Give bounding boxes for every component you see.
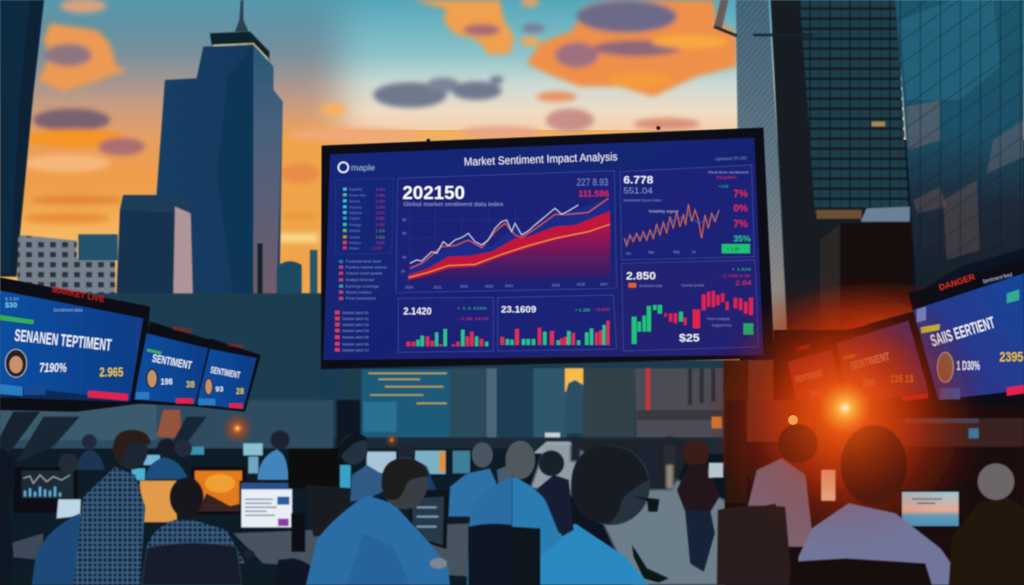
- left monitor: large sentiment screen: $ 3.90: [5, 297, 19, 303]
- sentiment percentages: 35%: [733, 233, 751, 243]
- right monitor: small sentiment screen: SENTIMENT: [794, 367, 825, 385]
- left monitor: small sentiment screen: SENTIMENT: [210, 365, 241, 380]
- seated man in blue shirt at laptop: [306, 457, 450, 585]
- left monitor: large sentiment screen: SENANEN TEPTIMENT: [14, 326, 112, 355]
- skyline: left buildings and blue tower: [0, 0, 333, 440]
- left sidebar list: sentiment tickers: 3.204: [376, 205, 385, 209]
- man at right of the left half: [467, 477, 512, 585]
- billboard date stamp: Updated 20:150: [715, 155, 748, 161]
- left sidebar list: news items: Earnings coverage: [346, 283, 380, 288]
- left sidebar list: sentiment tickers: [336, 178, 393, 254]
- blue office tower: [157, 32, 283, 440]
- skyline: street canyon below billboard: [317, 360, 792, 467]
- bar chart panel: 23.1609: [498, 295, 617, 351]
- orange lens flare: [720, 300, 970, 550]
- line chart panel: 6.778: Jul: [692, 250, 696, 254]
- glass office with gold window lines: [362, 369, 450, 440]
- distant monitors: [132, 443, 472, 488]
- sentiment percentages: 7%: [733, 189, 748, 200]
- candlestick panel: 2.850: Volume profile: [681, 282, 705, 287]
- chart subtitle: Global market sentiment data index: [403, 202, 504, 208]
- line chart panel: 6.778: Jan: [626, 251, 631, 255]
- right side dark interior: [705, 273, 1024, 585]
- monitor: white report screen: [239, 481, 294, 531]
- left monitor: large sentiment screen: 7190%: [39, 360, 67, 375]
- chart axis labels: 80: [402, 218, 406, 222]
- left sidebar list: news items: Price momentum: [346, 296, 376, 301]
- chart axis labels: 2026: [577, 283, 585, 287]
- left monitor: small sentiment screen: 28: [236, 387, 244, 396]
- camera booms: [15, 417, 207, 463]
- left sidebar list: news items: Analyst forecast: [346, 277, 375, 282]
- left monitor: large sentiment screen: [0, 277, 150, 412]
- mouse: [244, 550, 255, 558]
- green status badge: + 1.30: [726, 246, 740, 251]
- crane lamp: [714, 0, 813, 36]
- phone screen: [821, 470, 835, 501]
- right monitor: large sentiment screen: Sentiment feed: [982, 272, 1013, 285]
- right monitor bank: [773, 259, 1024, 483]
- line chart panel: 6.778: Volatility signal: [648, 210, 679, 214]
- left monitor: large sentiment screen: MARKET LIVE: [51, 284, 106, 304]
- right monitor: small sentiment screen: 16%: [809, 389, 823, 398]
- floor background behind the left monitors: [0, 400, 512, 585]
- bar chart panel: 2.1420: - 2.06 9170: [457, 316, 490, 321]
- billboard title: Market Sentiment Impact Analysis: [464, 151, 618, 169]
- left sidebar list: alerts: Market alert 04: [342, 328, 370, 333]
- left sidebar list: alerts: Market alert 06: [342, 341, 370, 346]
- laptop: [57, 499, 81, 518]
- right monitor: large sentiment screen: [908, 259, 1024, 407]
- candlestick panel: 2.850: [622, 260, 758, 351]
- street and pavement: [530, 436, 725, 585]
- left sidebar list: sentiment tickers: Energy: [349, 223, 361, 227]
- sunset sky: [0, 0, 1024, 400]
- billboard logo: maple: [351, 163, 375, 173]
- left sidebar list: sentiment tickers: Indices: [349, 241, 361, 245]
- pedestrian crowd: [569, 436, 685, 490]
- standing man in plaid shirt: [73, 430, 151, 585]
- clouds over the centre and right sky: [287, 0, 737, 142]
- sentiment percentages: 0%: [733, 204, 748, 215]
- main area chart panel: 111.586: [578, 189, 609, 199]
- left sidebar list: sentiment tickers: 1.820: [376, 241, 385, 245]
- right monitor: medium sentiment screen: DANGER: [849, 320, 870, 332]
- chart axis labels: 2023: [485, 285, 493, 289]
- left sidebar list: sentiment tickers: 2.156: [376, 193, 385, 197]
- dark monitor base: [292, 513, 305, 552]
- dark central tower: [771, 0, 913, 340]
- candlestick panel: 2.850: Sentiment data: [639, 283, 663, 288]
- left monitor: medium sentiment screen: [132, 322, 210, 407]
- building at left edge: [0, 0, 44, 277]
- left support arms: [0, 412, 40, 457]
- candlestick panel: 2.850: Support line: [712, 324, 732, 328]
- right monitor: medium sentiment screen: [833, 312, 935, 413]
- left sidebar list: sentiment tickers: Rates: [349, 246, 359, 250]
- dark figure at left edge: [0, 448, 15, 585]
- dark interior behind right monitors: [773, 330, 1024, 483]
- left sidebar list: news items: Positive market outlook: [346, 265, 387, 270]
- left sidebar list: alerts: Market alert 07: [342, 347, 370, 352]
- left sidebar list: sentiment tickers: Bonds: [349, 199, 360, 203]
- monitor: sunset image screen: [191, 467, 246, 515]
- bar chart panel: 23.1609: + 1.380: [575, 308, 591, 313]
- left sidebar list: alerts: [335, 310, 370, 352]
- line chart panel: 6.778: Sentiment Score Index: [623, 199, 662, 203]
- chart axis labels: [401, 218, 608, 289]
- trading laptop with dark charts: [408, 491, 448, 549]
- line chart panel: 6.778: Mar: [648, 250, 655, 254]
- candlestick panel: 2.850: Trend analysis: [707, 317, 730, 321]
- skyline: right towers: [714, 0, 1024, 387]
- distant staff: [58, 431, 512, 517]
- left monitor bank: [0, 277, 261, 457]
- left monitor: small sentiment screen: MARKET: [228, 342, 245, 350]
- orange work light: [221, 412, 253, 444]
- reflective glass tower: [895, 0, 1024, 293]
- bar chart panel: 2.1420: + 1.4 1150: [457, 305, 488, 310]
- right monitor: medium sentiment screen: 135 13: [890, 374, 913, 386]
- headline figure 202150: 202150: [402, 182, 465, 203]
- chair, backlit: [717, 506, 792, 585]
- chart axis labels: 2025: [552, 283, 560, 287]
- chart axis labels: 60: [402, 231, 406, 235]
- bar chart panel: 23.1609: 23.1609: [501, 304, 536, 314]
- chart axis labels: 2022: [460, 285, 468, 289]
- line chart panel: 6.778: 6.778: [623, 175, 653, 187]
- chart axis labels: 20: [401, 270, 405, 274]
- candlestick panel: 2.850: $25: [679, 333, 700, 345]
- line chart panel: 6.778: Negative: [717, 175, 737, 179]
- left sidebar list: sentiment tickers: 1.190: [376, 199, 385, 203]
- clouds over the left sky: [23, 0, 320, 243]
- workers seated and standing at the left of the floor: [0, 430, 512, 585]
- main area chart panel: [396, 171, 617, 293]
- left sidebar list: sentiment tickers: Futures: [349, 205, 362, 209]
- stepped foreground tower: [115, 195, 193, 333]
- man with glasses, back to camera: [517, 445, 669, 585]
- right monitor: small sentiment screen: DANGER: [796, 344, 811, 353]
- left sidebar list: sentiment tickers: Metals: [349, 229, 360, 233]
- man in lavender shirt, backlit: [789, 425, 966, 585]
- left sidebar list: sentiment tickers: Options: [349, 211, 362, 215]
- man in pale shirt, backlit: [747, 424, 818, 547]
- left sidebar list: sentiment tickers: Equities: [349, 188, 363, 192]
- candlestick panel: 2.850: 2.850: [626, 270, 656, 282]
- bar chart panel: 2.1420: 2.1420: [403, 306, 432, 317]
- line chart panel: 6.778: +118: [718, 184, 728, 188]
- line chart panel: 6.778: 551.04: [623, 186, 653, 196]
- bar chart panel: 2.1420: [398, 297, 493, 352]
- right monitor: large sentiment screen: 1 D30%: [957, 358, 980, 373]
- left sidebar list: sentiment tickers: Grains: [349, 235, 360, 239]
- left monitor: medium sentiment screen: 198: [161, 377, 173, 387]
- billboard logo: [338, 162, 375, 173]
- seated man in plaid with office chair: [142, 477, 245, 585]
- left monitor: medium sentiment screen: 38: [186, 379, 195, 389]
- monitor: orange document screen: [140, 481, 177, 522]
- left sidebar list: alerts: Market alert 01: [342, 310, 370, 315]
- desks: [233, 523, 473, 577]
- left monitor: large sentiment screen: Sentiment data: [53, 308, 83, 313]
- right monitor: medium sentiment screen: SENTIMENT: [849, 351, 891, 373]
- left monitor: medium sentiment screen: MARKET: [172, 326, 193, 335]
- billboard: Market Sentiment Impact Analysis: [321, 126, 774, 369]
- candlestick panel: 2.850: + 1.620: [732, 267, 752, 272]
- chart readouts: 227 8.93: [577, 177, 609, 188]
- striped glass tower: [736, 0, 787, 340]
- sentiment percentages: 7%: [733, 219, 748, 230]
- sentiment percentages: [733, 189, 751, 243]
- left sidebar list: sentiment tickers: 2.410: [376, 235, 385, 239]
- candlestick panel: 2.850: - 2.1480 0.55: [720, 273, 751, 278]
- left monitor: large sentiment screen: 2.965: [99, 365, 124, 380]
- left sidebar list: sentiment tickers: 2.680: [376, 217, 385, 221]
- equipment rack: [305, 485, 355, 537]
- left monitor: medium sentiment screen: SENTIMENT: [151, 353, 193, 372]
- left sidebar list: sentiment tickers: 1.306: [376, 229, 385, 233]
- antenna: [235, 0, 248, 32]
- left sidebar list: sentiment tickers: 0.742: [376, 223, 385, 227]
- left sidebar list: sentiment tickers: 1.024: [376, 188, 385, 192]
- monitor near the woman: [709, 463, 723, 478]
- left sidebar list: alerts: Market alert 03: [342, 322, 370, 327]
- line chart panel: 6.778: [620, 165, 754, 260]
- brown wall and support column right of the canyon: [723, 360, 792, 467]
- man in suit: [538, 451, 574, 537]
- left sidebar list: news items: Sector rotation: [346, 289, 372, 294]
- candlestick panel: 2.850: 2.84: [735, 281, 753, 287]
- left sidebar list: sentiment tickers: Forex rate: [349, 193, 366, 197]
- woman walking in dark coat: [677, 439, 720, 572]
- left monitor: small sentiment screen: 93: [215, 384, 223, 393]
- chart axis labels: 40: [402, 255, 406, 259]
- left sidebar list: sentiment tickers: 1.275: [372, 246, 381, 250]
- office chair: [275, 558, 325, 585]
- left sidebar list: news items: Financial news feed: [346, 259, 381, 264]
- left sidebar list: news items: Volume trend update: [346, 271, 383, 276]
- chart axis labels: 2020: [405, 285, 413, 289]
- left monitor: large sentiment screen: $30: [5, 300, 17, 309]
- right monitor: medium sentiment screen: 296: [863, 378, 875, 389]
- right monitor: small sentiment screen: [783, 344, 845, 420]
- grey apartment block: [17, 235, 115, 333]
- seated man in blue, far left: [32, 513, 90, 585]
- line chart panel: 6.778: Real-time sentiment: [708, 171, 748, 175]
- workers and pedestrians at the right of the floor: [505, 273, 1024, 585]
- monitor: chart screen: [13, 467, 78, 513]
- line chart panel: 6.778: May: [673, 250, 680, 254]
- laptop with skyline wallpaper: [900, 490, 960, 528]
- man with light-blue shirt, left: [505, 441, 562, 585]
- older man at far right: [949, 463, 1024, 585]
- chart axis labels: 2027: [600, 283, 608, 287]
- left sidebar list: sentiment tickers: Crypto: [349, 217, 360, 221]
- left monitor: small sentiment screen: [197, 338, 261, 412]
- left sidebar list: alerts: Market alert 02: [342, 316, 370, 321]
- left sidebar list: sentiment tickers: 1.510: [376, 211, 385, 215]
- bar chart panel: 23.1609: - 8.640: [594, 307, 610, 312]
- right monitor: large sentiment screen: DANGER: [938, 271, 977, 293]
- black block with pale rooftop sign: [820, 207, 913, 340]
- chart axis labels: 2024: [505, 284, 513, 288]
- chart axis labels: 2021: [433, 285, 441, 289]
- left sidebar list: news items: [339, 259, 387, 301]
- left sidebar list: alerts: Market alert 05: [342, 335, 370, 340]
